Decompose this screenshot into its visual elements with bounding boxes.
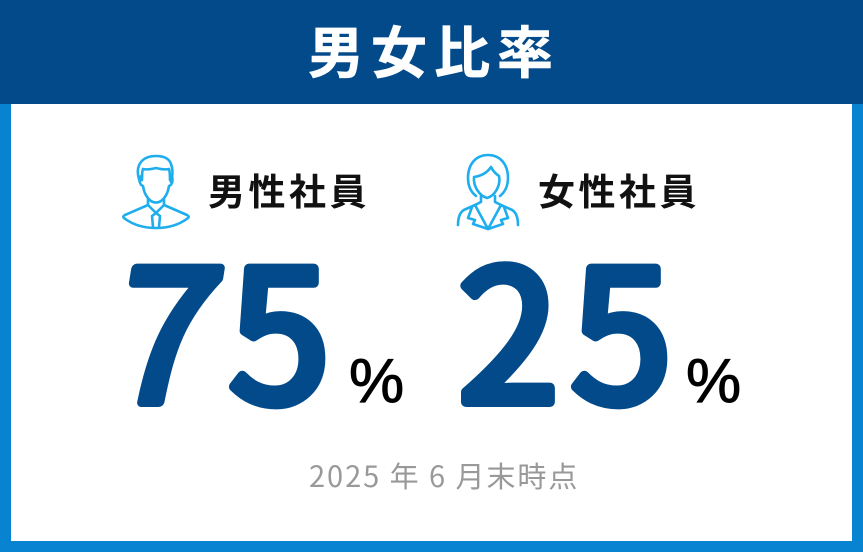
figure: female 25% — [458, 192, 741, 455]
icon: female employee — [458, 155, 518, 229]
figure: male 75% — [98, 191, 404, 455]
figure: female 25%: % — [686, 347, 741, 416]
label: female employees: 女性社員 — [538, 162, 700, 216]
label: male employees: 男性社員 — [208, 162, 370, 216]
figure: female 25%: 2 — [458, 192, 559, 455]
figure: female 25%: 5 — [571, 192, 672, 455]
note: as of June 2025: 2025 年 6 月末時点 — [309, 454, 579, 496]
icon: male employee — [123, 156, 189, 228]
title: 男女比率 — [308, 9, 560, 90]
header band — [0, 0, 863, 104]
figure: male 75%: 5 — [229, 192, 330, 455]
figure: male 75%: 7 — [98, 191, 241, 455]
figure: male 75%: % — [349, 347, 404, 416]
